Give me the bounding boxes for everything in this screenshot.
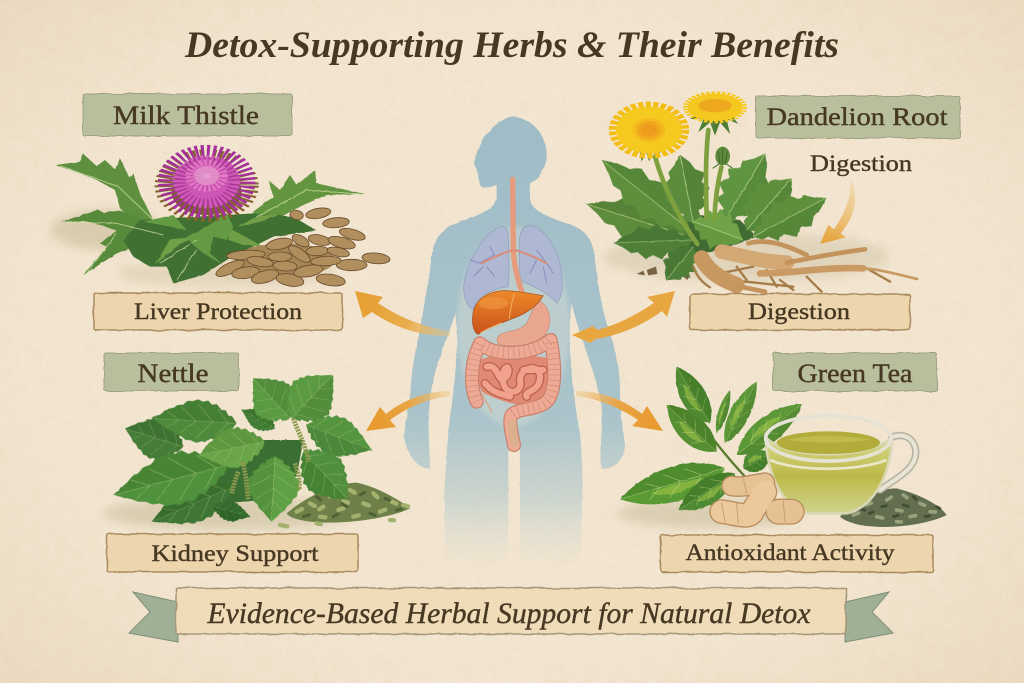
label: Liver Protection: [94, 293, 342, 330]
label: Dandelion Root: [756, 96, 960, 138]
dandelion flower right: [688, 94, 742, 136]
label: Kidney Support: [107, 534, 358, 572]
bottom ribbon banner: [129, 588, 893, 642]
spiky leaves: [55, 154, 365, 283]
body silhouette: [404, 117, 625, 567]
dandelion leaves: [580, 141, 836, 292]
arrow: to milk thistle: [355, 291, 450, 336]
lungs: [464, 226, 562, 309]
label: Kidney Support: Kidney Support: [152, 541, 319, 566]
label: Nettle: [104, 353, 239, 391]
label: Nettle: Nettle: [138, 359, 208, 388]
herb: dandelion root illustration: [580, 94, 917, 292]
label: Digestion: [690, 294, 910, 330]
bronchi branches: [482, 250, 547, 263]
nettle leaves: [106, 358, 379, 540]
arrow: to green tea: [576, 391, 663, 431]
liver: [472, 291, 543, 334]
dried nettle pile: [280, 483, 410, 526]
tea cup: [766, 416, 916, 513]
dry tea pile: [840, 488, 947, 527]
label: Green Tea: [773, 353, 937, 391]
banner scroll: [176, 588, 846, 634]
organ glow: [457, 227, 570, 427]
roots: [693, 242, 917, 292]
dandelion bud: [713, 147, 733, 168]
trachea and bronchi: [513, 179, 522, 293]
small intestine: [478, 355, 550, 405]
thistle flower head: [172, 157, 242, 215]
large intestine: [472, 340, 554, 445]
banner text: Evidence-Based Herbal Support for Natural Detox: [207, 597, 811, 630]
ribbon tails: [129, 592, 178, 642]
herb: green tea illustration: [615, 361, 947, 528]
right ribbon tail: [845, 592, 893, 642]
label: Antioxidant Activity: [661, 535, 933, 572]
dandelion stems: [655, 130, 721, 244]
dandelion flower left: [616, 107, 682, 162]
annotation: Digestion: Digestion: [810, 151, 913, 176]
label: Digestion: Digestion: [748, 299, 851, 324]
label: Milk Thistle: [83, 94, 292, 136]
label: Antioxidant Activity: Antioxidant Activity: [686, 540, 895, 565]
label: Milk Thistle: Milk Thistle: [113, 101, 259, 130]
herb: milk thistle illustration: [50, 154, 390, 288]
tea leaves: [615, 361, 810, 521]
soil specks: [637, 267, 689, 280]
stomach: [497, 302, 550, 346]
label: Liver Protection: Liver Protection: [134, 299, 303, 324]
arrow: to dandelion root and body: [572, 291, 675, 343]
nettle flower catkins: [232, 418, 308, 500]
small curved arrow: [820, 178, 855, 244]
herb: nettle illustration: [103, 358, 410, 540]
title: Detox-Supporting Herbs & Their Benefits: [184, 25, 839, 66]
arrow: to nettle: [366, 391, 450, 431]
milk thistle seeds: [214, 206, 390, 288]
ginger root: [722, 478, 792, 523]
label: Dandelion Root: Dandelion Root: [766, 104, 948, 131]
label: Green Tea: Green Tea: [798, 359, 913, 388]
human body with organs: [404, 117, 625, 567]
